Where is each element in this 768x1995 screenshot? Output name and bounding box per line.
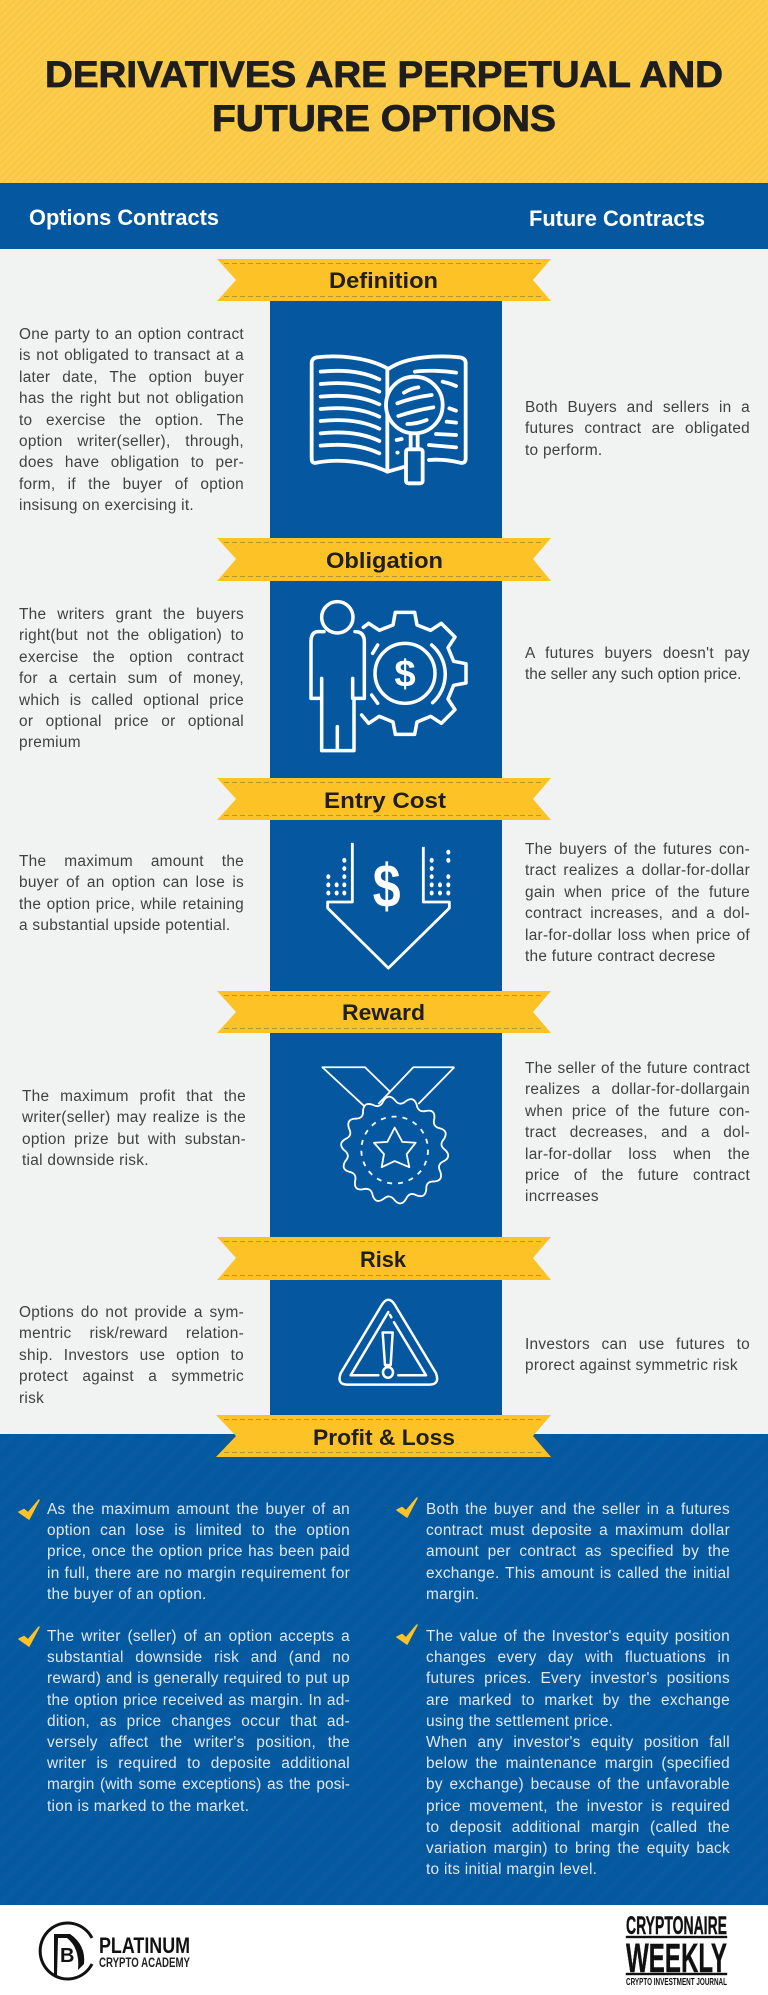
text: profit and loss left 2: The writer (seller) of an option accepts a — [47, 1628, 350, 1645]
text: profit and loss right 2: are marked to market by the exchange — [426, 1692, 730, 1709]
text: obligation options: which is called optional price — [19, 692, 244, 709]
text: profit and loss left 2: the option price received as margin. In ad- — [47, 1692, 350, 1709]
text: profit and loss right 2: When any investor's equity position fall — [426, 1734, 730, 1751]
text: entry cost options — [19, 853, 244, 934]
logo: Cryptonaire Weekly — [626, 1912, 727, 1988]
text: definition futures: futures contract are obligated — [525, 420, 750, 437]
text: profit and loss right 1: exchange. This amount is called the initial — [426, 1565, 730, 1582]
footer — [0, 1905, 768, 1995]
text: reward futures — [525, 1060, 750, 1205]
column heading: options: Options Contracts — [29, 205, 219, 230]
page background — [0, 249, 768, 1439]
text: reward futures: tract decreases, and a dol- — [525, 1124, 750, 1141]
text: profit and loss left 1: option can lose is limited to the option — [47, 1522, 350, 1539]
text: entry cost options: The maximum amount the — [19, 853, 244, 870]
text: profit and loss right 2: using the settlement price. — [426, 1713, 613, 1730]
text: profit and loss right 2: by exchange) because of the unfavorable — [426, 1776, 730, 1793]
text: profit and loss left 2: reward) and is generally required to put up — [47, 1670, 350, 1687]
ribbon: Obligation — [217, 538, 551, 581]
text: risk options: protect against a symmetric — [19, 1368, 244, 1385]
text: profit and loss right 2: to its initial margin level. — [426, 1861, 597, 1878]
ribbon: Reward — [217, 991, 551, 1033]
text: profit and loss left 1 — [47, 1501, 350, 1603]
text: risk options: mentric risk/reward relation- — [19, 1325, 244, 1342]
text: profit and loss left 2: dition, as price changes occur that ad- — [47, 1713, 350, 1730]
text: obligation options: The writers grant the buyers — [19, 606, 244, 623]
ribbon: Obligation: Obligation — [326, 548, 443, 573]
text: profit and loss right 1: Both the buyer and the seller in a futures — [426, 1501, 730, 1518]
text: profit and loss left 2 — [47, 1628, 350, 1815]
text: profit and loss right 2 — [426, 1628, 730, 1878]
text: definition options: One party to an option contract — [19, 326, 244, 343]
text: entry cost options: the option price, while retaining — [19, 896, 244, 913]
text: definition futures: to perform. — [525, 442, 602, 459]
text: profit and loss left 1: the buyer of an option. — [47, 1586, 207, 1603]
text: definition options: has the right but not obligation — [19, 390, 244, 407]
text: reward options: tial downside risk. — [22, 1152, 149, 1169]
text: reward options: The maximum profit that the — [22, 1088, 246, 1105]
logo: Platinum Crypto Academy — [40, 1923, 190, 1979]
text: obligation options: right(but not the obligation) to — [19, 627, 244, 644]
logo: Platinum Crypto Academy: B — [60, 1945, 74, 1967]
text: profit and loss right 2: price movement, the investor is required — [426, 1798, 730, 1815]
text: entry cost futures: gain when price of the future — [525, 884, 750, 901]
center blue column panels — [270, 300, 502, 1415]
bottom blue panel — [0, 1434, 768, 1905]
text: definition options: option writer(seller), through, — [19, 433, 244, 450]
text: definition options: to exercise the option. The — [19, 412, 244, 429]
ribbon: Profit & Loss — [216, 1415, 551, 1457]
text: reward futures: when price of the future con- — [525, 1103, 750, 1120]
ribbon: Definition — [217, 259, 551, 301]
text: profit and loss right 2: The value of the Investor's equity position — [426, 1628, 730, 1645]
icon: open book with magnifier — [312, 356, 466, 483]
text: reward futures: incrreases — [525, 1188, 599, 1205]
text: obligation options: for a certain sum of money, — [19, 670, 244, 687]
icon: check 2 — [19, 1627, 39, 1646]
column heading: futures: Future Contracts — [529, 206, 705, 231]
text: definition options: later date, The option buyer — [19, 369, 244, 386]
title — [45, 54, 723, 139]
text: profit and loss left 2: substantial downside risk and (and no — [47, 1649, 350, 1666]
text: entry cost futures: tract realizes a dollar-for-dollar — [525, 862, 750, 879]
title: FUTURE OPTIONS — [212, 98, 556, 139]
text: reward options: writer(seller) may realize is the — [22, 1109, 246, 1126]
text: reward futures: price of the future contract — [525, 1167, 750, 1184]
text: definition options: is not obligated to transact at a — [19, 347, 244, 364]
text: entry cost futures: the future contract decrese — [525, 948, 716, 965]
text: risk options: ship. Investors use option to — [19, 1347, 244, 1364]
text: obligation futures: the seller any such option price. — [525, 666, 741, 683]
ribbon: Profit & Loss: Profit & Loss — [313, 1425, 455, 1450]
text: definition options: form, if the buyer of option — [19, 476, 244, 493]
text: obligation futures: A futures buyers doesn't pay — [525, 645, 750, 662]
text: profit and loss right 2: below the maintenance margin (specified — [426, 1755, 730, 1772]
ribbon: Entry Cost: Entry Cost — [324, 788, 447, 813]
text: entry cost futures: The buyers of the futures con- — [525, 841, 750, 858]
text: profit and loss left 2: writer is required to deposite additional — [47, 1755, 350, 1772]
text: reward futures: The seller of the future contract — [525, 1060, 750, 1077]
text: risk options: risk — [19, 1390, 44, 1407]
icon: dollar down arrow: $ — [373, 851, 401, 920]
text: entry cost options: buyer of an option can lose is — [19, 874, 244, 891]
icon: check 3 — [397, 1498, 417, 1517]
column header bar — [0, 183, 768, 249]
icon: check 4 — [397, 1625, 417, 1644]
text: obligation options: premium — [19, 734, 81, 751]
icon: warning triangle — [340, 1300, 437, 1385]
text: risk futures: Investors can use futures to — [525, 1336, 750, 1353]
header band — [0, 0, 768, 183]
text: reward futures: lar-for-dollar loss when the — [525, 1146, 750, 1163]
text: obligation options: exercise the option contract — [19, 649, 244, 666]
text: definition options: insisung on exercising it. — [19, 497, 194, 514]
ribbon: Risk: Risk — [360, 1247, 407, 1272]
text: profit and loss right 2: futures prices. Every investor's positions — [426, 1670, 730, 1687]
ribbon: Reward: Reward — [342, 1000, 425, 1025]
text: profit and loss left 2: tion is marked to the market. — [47, 1798, 249, 1815]
text: entry cost options: a substantial upside potential. — [19, 917, 230, 934]
text: profit and loss right 2: to deposit additional margin (called the — [426, 1819, 730, 1836]
text: definition options — [19, 326, 244, 514]
logo: Platinum Crypto Academy: PLATINUM — [99, 1933, 190, 1958]
text: obligation futures — [525, 645, 750, 683]
text: obligation options: or optional price or optional — [19, 713, 244, 730]
text: entry cost futures: contract increases, and a dol- — [525, 905, 750, 922]
icon: person with dollar gear — [311, 602, 466, 751]
text: profit and loss right 1 — [426, 1501, 730, 1603]
text: profit and loss right 1: contract must deposite a maximum dollar — [426, 1522, 730, 1539]
text: profit and loss right 1: amount per contract as specified by the — [426, 1543, 730, 1560]
text: entry cost futures — [525, 841, 750, 965]
ribbon: Risk — [217, 1237, 551, 1280]
icon: dollar down arrow — [326, 843, 450, 968]
text: profit and loss left 2: margin (with some exceptions) as the posi- — [47, 1776, 350, 1793]
text: risk futures — [525, 1336, 750, 1374]
text: risk options — [19, 1304, 244, 1407]
text: entry cost futures: lar-for-dollar loss when price of — [525, 927, 750, 944]
text: profit and loss left 2: versely affect the writer's position, the — [47, 1734, 350, 1751]
text: reward options: option prize but with substan- — [22, 1131, 246, 1148]
text: profit and loss right 2: variation margin) to bring the equity back — [426, 1840, 730, 1857]
text: profit and loss left 1: As the maximum amount the buyer of an — [47, 1501, 350, 1518]
text: reward futures: realizes a dollar-for-dollargain — [525, 1081, 750, 1098]
text: obligation options — [19, 606, 244, 751]
text: definition options: does have obligation to per- — [19, 454, 244, 471]
text: risk futures: prorect against symmetric risk — [525, 1357, 738, 1374]
ribbon: Entry Cost — [217, 778, 551, 820]
text: profit and loss left 1: in full, there are no margin requirement for — [47, 1565, 350, 1582]
text: definition futures — [525, 399, 750, 459]
text: definition futures: Both Buyers and sellers in a — [525, 399, 750, 416]
ribbon: Definition: Definition — [329, 268, 438, 293]
logo: Platinum Crypto Academy: CRYPTO ACADEMY — [99, 1955, 190, 1970]
icon: person with dollar gear: $ — [394, 653, 416, 696]
icon: medal — [322, 1067, 454, 1203]
text: profit and loss right 1: margin. — [426, 1586, 479, 1603]
text: reward options — [22, 1088, 246, 1169]
title: DERIVATIVES ARE PERPETUAL AND — [45, 54, 723, 95]
text: risk options: Options do not provide a sym- — [19, 1304, 244, 1321]
text: profit and loss left 1: price, once the option price has been paid — [47, 1543, 350, 1560]
text: profit and loss right 2: changes every day with fluctuations in — [426, 1649, 730, 1666]
icon: check 1 — [19, 1500, 39, 1519]
